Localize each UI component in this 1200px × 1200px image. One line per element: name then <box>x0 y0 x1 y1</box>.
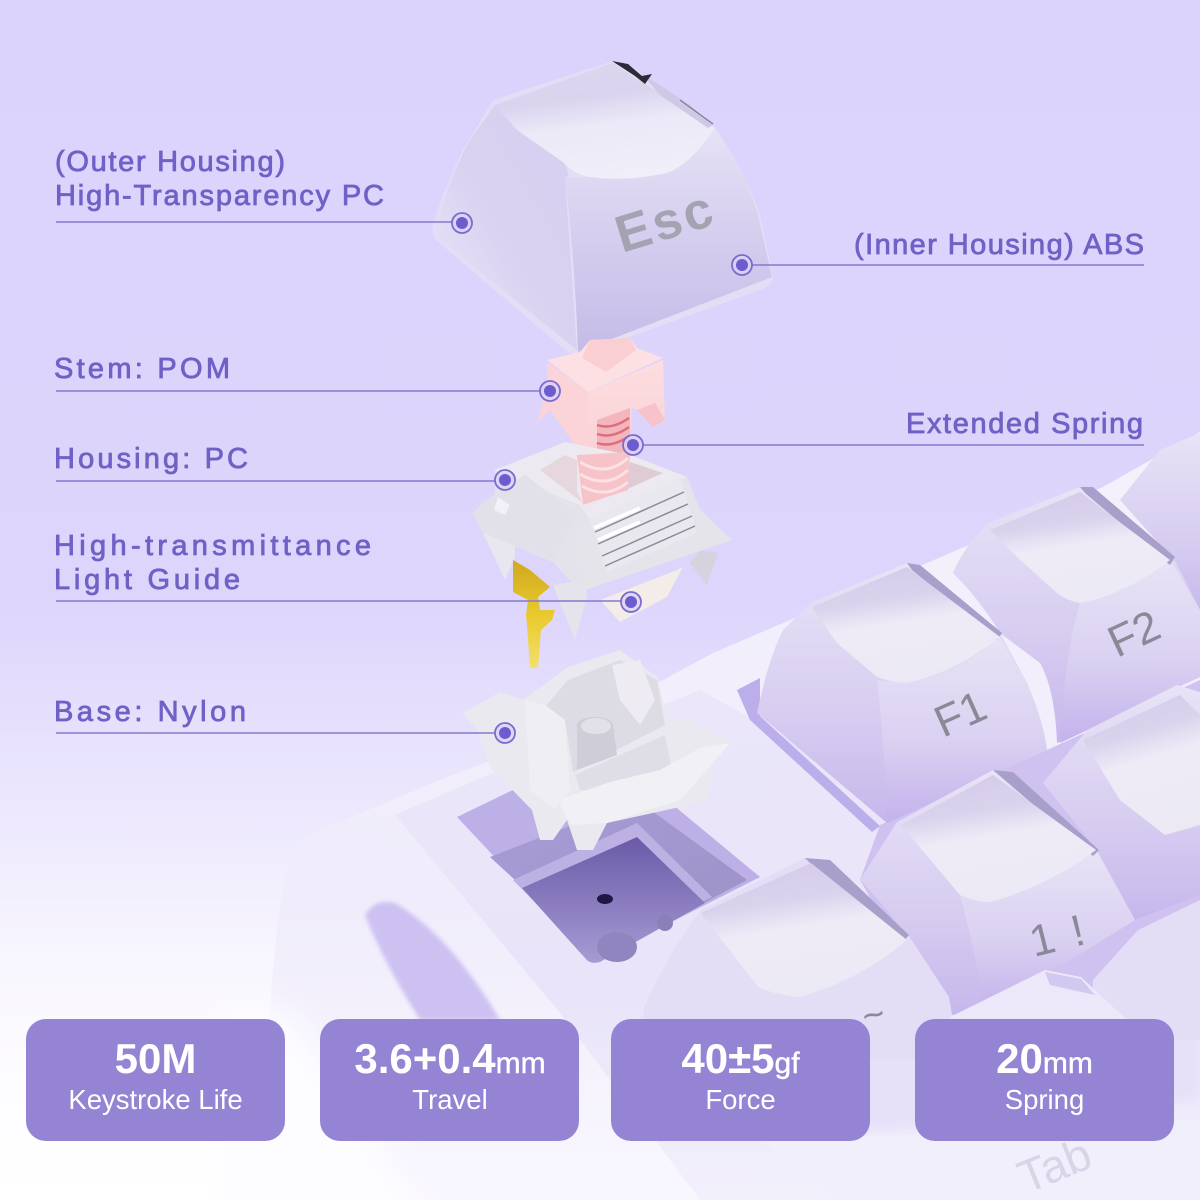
keycap: top right <box>1120 433 1200 620</box>
keycap: right of 1 <box>1043 685 1200 920</box>
label: light guide: Light Guide <box>54 564 240 596</box>
opening <box>540 455 583 503</box>
keycap: lower right <box>1090 900 1200 1040</box>
keycap: tilde <box>640 858 960 1060</box>
spec card: keystroke life: Keystroke Life <box>68 1084 243 1115</box>
label: stem <box>54 353 560 401</box>
spec card: travel: Travel <box>412 1084 488 1115</box>
label: extended spring <box>623 408 1144 455</box>
exploded: pink stem <box>538 338 665 460</box>
spec card: travel <box>320 1019 579 1141</box>
exploded: Esc keycap: Esc <box>609 179 723 264</box>
F1 socket corner <box>737 678 880 832</box>
fins <box>483 530 515 580</box>
spec card: keystroke life: 50M <box>115 1035 196 1082</box>
exploded: base <box>463 650 730 850</box>
light guide window <box>590 478 697 572</box>
spec card: spring: 20mm <box>996 1035 1093 1082</box>
spec card: keystroke life <box>26 1019 285 1141</box>
keycap: F2: F2 <box>1101 601 1168 667</box>
spec card: spring <box>915 1019 1174 1141</box>
spring <box>597 408 630 460</box>
label: outer housing: High-Transparency PC <box>55 180 384 212</box>
spec card: force <box>611 1019 870 1141</box>
exploded: Esc keycap <box>432 61 773 354</box>
gold pins <box>513 560 555 668</box>
label: stem: Stem: POM <box>54 353 230 385</box>
keycap: Tab <box>764 1120 1200 1200</box>
spring lower <box>577 452 630 505</box>
label: inner housing: (Inner Housing) ABS <box>854 229 1144 261</box>
label: inner housing <box>732 229 1144 275</box>
lavender glow under keys <box>860 680 1200 1040</box>
keycap: lower middle <box>950 970 1150 1060</box>
label: light guide <box>54 530 641 612</box>
keycap: F1: F1 <box>927 681 994 747</box>
light guide base <box>600 567 683 622</box>
label: base <box>54 696 515 743</box>
spec card: force: 40±5gf <box>681 1035 800 1082</box>
spec card: force: Force <box>705 1084 776 1115</box>
keycap: F1 <box>757 563 1047 823</box>
side recess <box>365 902 500 1020</box>
exploded: switch housing <box>472 442 732 668</box>
keyboard body <box>220 432 1200 1200</box>
spec card: spring: Spring <box>1005 1084 1084 1115</box>
lower glow fade <box>640 1010 1200 1130</box>
keycap: 1: 1 ! <box>1025 905 1093 967</box>
keycap: F2 <box>953 487 1200 743</box>
label: light guide: High-transmittance <box>54 530 371 562</box>
label: outer housing: (Outer Housing) <box>55 146 285 178</box>
label: outer housing <box>55 146 472 233</box>
switch socket <box>457 790 760 963</box>
keycap: 1 <box>860 770 1135 1015</box>
label: housing: Housing: PC <box>54 443 248 475</box>
label: extended spring: Extended Spring <box>906 408 1143 440</box>
label: housing <box>54 443 515 490</box>
label: base: Base: Nylon <box>54 696 246 728</box>
spec card: travel: 3.6+0.4mm <box>354 1035 546 1082</box>
keycap: tilde: ~ <box>857 992 890 1039</box>
